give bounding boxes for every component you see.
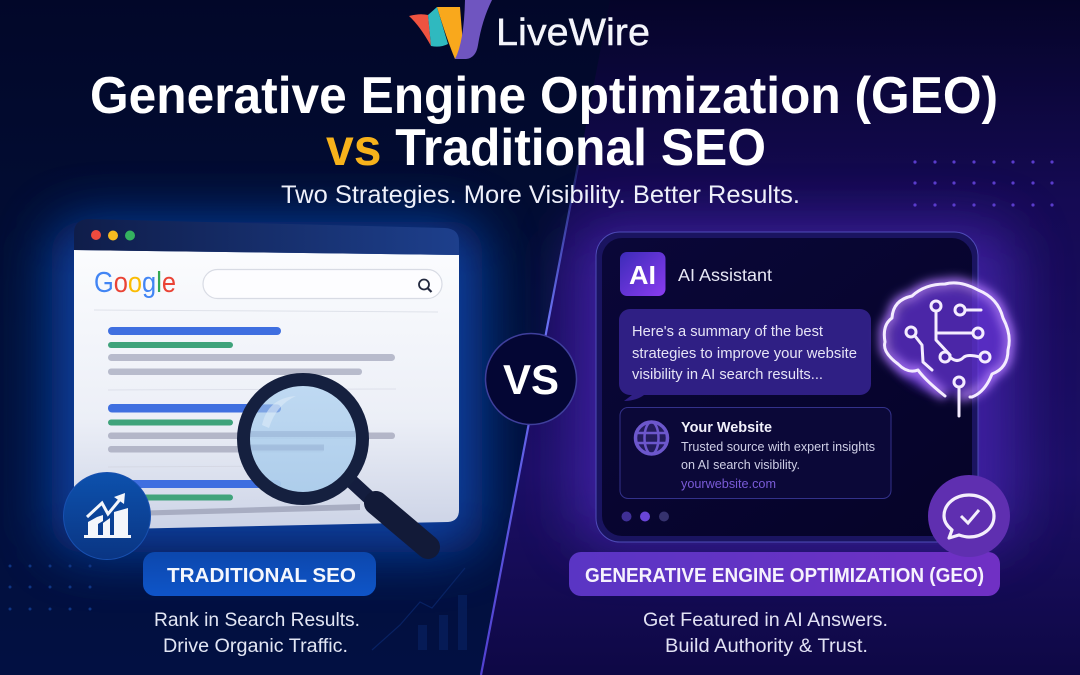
logo: LiveWire [409, 0, 650, 59]
icon: growth chart badge [64, 472, 150, 560]
website source card: Your Website [681, 420, 772, 436]
window controls [91, 230, 135, 240]
chat bubble: Here's a summary of the best [632, 324, 823, 340]
chat bubble: strategies to improve your website [632, 346, 857, 362]
title: Generative Engine Optimization (GEO) [90, 67, 998, 125]
chat bubble [619, 309, 871, 401]
background: left glow [52, 222, 482, 552]
search result 1 [108, 327, 395, 375]
icon: chat check badge [928, 475, 1010, 557]
icon: neon brain [884, 283, 1009, 416]
frame [244, 380, 362, 498]
label pill: GEO [569, 552, 1000, 596]
title [90, 67, 998, 177]
website source card: Trusted source with expert insights [681, 440, 875, 454]
search result 3 [130, 480, 360, 516]
text: traditional SEO description [154, 610, 360, 657]
decorative dots left [8, 564, 92, 610]
label pill: traditional SEO: TRADITIONAL SEO [167, 565, 356, 587]
label pill: traditional SEO [143, 552, 376, 596]
label pill: GEO: GENERATIVE ENGINE OPTIMIZATION (GEO) [585, 565, 984, 587]
badge: VS [486, 334, 576, 424]
AI icon tile [620, 252, 666, 296]
website source card: on AI search visibility. [681, 458, 800, 472]
text: traditional SEO description: Drive Organic Traffic. [163, 636, 348, 657]
decorative dots right [913, 160, 1054, 207]
Google logo: Google [94, 267, 176, 299]
icon: LiveWire mark [409, 0, 492, 59]
text: traditional SEO description: Rank in Search Results. [154, 610, 360, 631]
background: divider line [481, 165, 578, 675]
search box [203, 270, 442, 298]
panel frame [596, 232, 978, 542]
badge: VS: VS [503, 356, 559, 403]
search result 2 [108, 404, 395, 452]
website source card: yourwebsite.com [681, 477, 776, 491]
icon: magnifying glass [243, 379, 428, 547]
title: vs Traditional SEO [326, 119, 766, 177]
lens [243, 379, 363, 499]
subtitle: Two Strategies. More Visibility. Better Results. [281, 181, 800, 209]
chat bubble: visibility in AI search results... [632, 367, 823, 383]
pagination dots [622, 512, 669, 522]
website source card [620, 408, 891, 498]
browser title bar [74, 219, 459, 255]
panel: browser window [74, 219, 459, 530]
faint background chart [372, 568, 467, 650]
background: right glow [575, 225, 1015, 545]
wordmark: LiveWire [496, 12, 650, 54]
background: right side [481, 0, 1080, 675]
AI icon tile: AI [629, 260, 656, 290]
text: GEO description: Get Featured in AI Answers. [643, 610, 888, 631]
panel: AI assistant [596, 232, 978, 542]
icon: globe [636, 422, 668, 454]
text: GEO description: Build Authority & Trust. [665, 636, 868, 657]
text: GEO description [643, 610, 888, 657]
browser body [74, 250, 459, 530]
AI assistant heading: AI Assistant [678, 265, 772, 285]
handle [350, 480, 376, 504]
